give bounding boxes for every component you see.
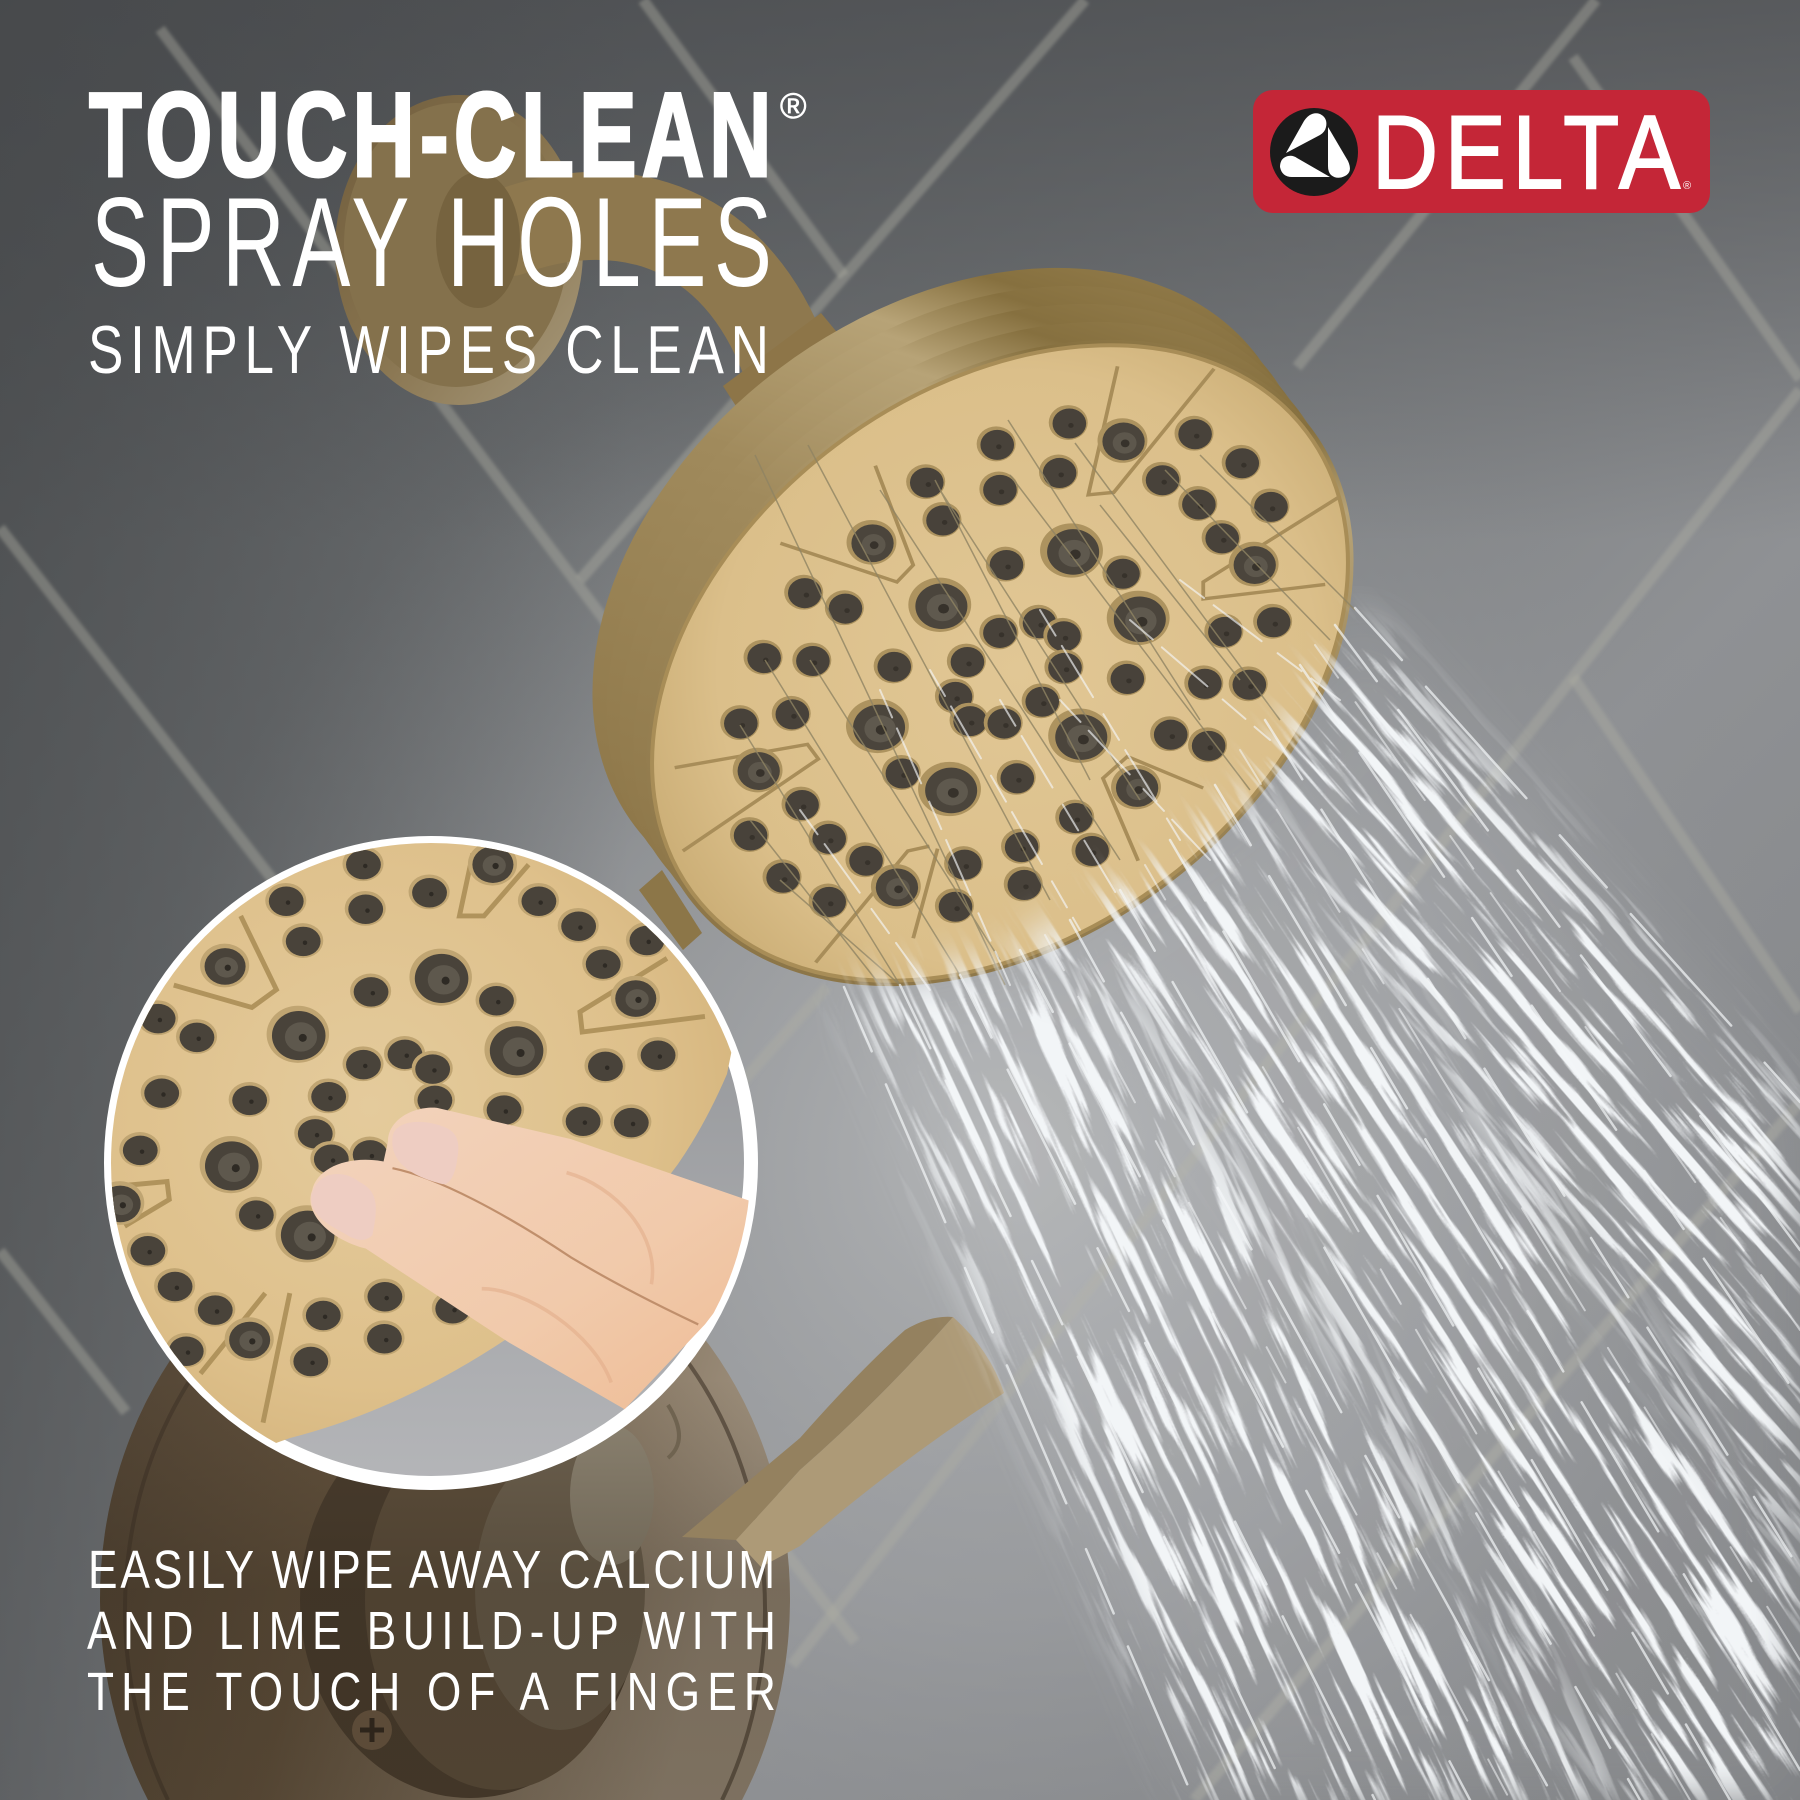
inset nozzles [95, 842, 759, 1423]
head face [529, 214, 1471, 1112]
shower arm and wall mount [335, 95, 845, 420]
callout text [87, 1540, 776, 1722]
two fingers [310, 1108, 759, 1409]
callout text: EASILY WIPE AWAY CALCIUM [88, 1540, 775, 1600]
water spray streams [799, 579, 1800, 1800]
faucet lever handle [682, 1317, 1004, 1567]
subtitle: SIMPLY WIPES CLEAN [88, 312, 769, 387]
logo registered mark: ® [1683, 180, 1691, 192]
callout text: AND LIME BUILD-UP WITH [87, 1601, 776, 1661]
inset circle: fingers wiping spray holes [104, 836, 758, 1490]
inset shower face [111, 843, 732, 1443]
registered mark: ® [780, 85, 807, 126]
logo mark [1270, 108, 1358, 196]
callout text: THE TOUCH OF A FINGER [87, 1662, 776, 1722]
thin spray lines across face [740, 420, 1355, 985]
logo wordmark: DELTA [1372, 94, 1681, 210]
head body [467, 134, 1479, 1120]
title line: Spray Holes: SPRAY HOLES [91, 172, 772, 314]
nozzle array [675, 366, 1339, 963]
adjuster nub [639, 870, 702, 950]
water spray haze [844, 608, 1800, 1800]
Delta logo [1253, 90, 1710, 213]
valve trim plate [100, 1204, 790, 1800]
title line: Touch-Clean: TOUCH-CLEAN [89, 68, 772, 202]
shower head [467, 134, 1479, 1120]
title [88, 68, 807, 387]
